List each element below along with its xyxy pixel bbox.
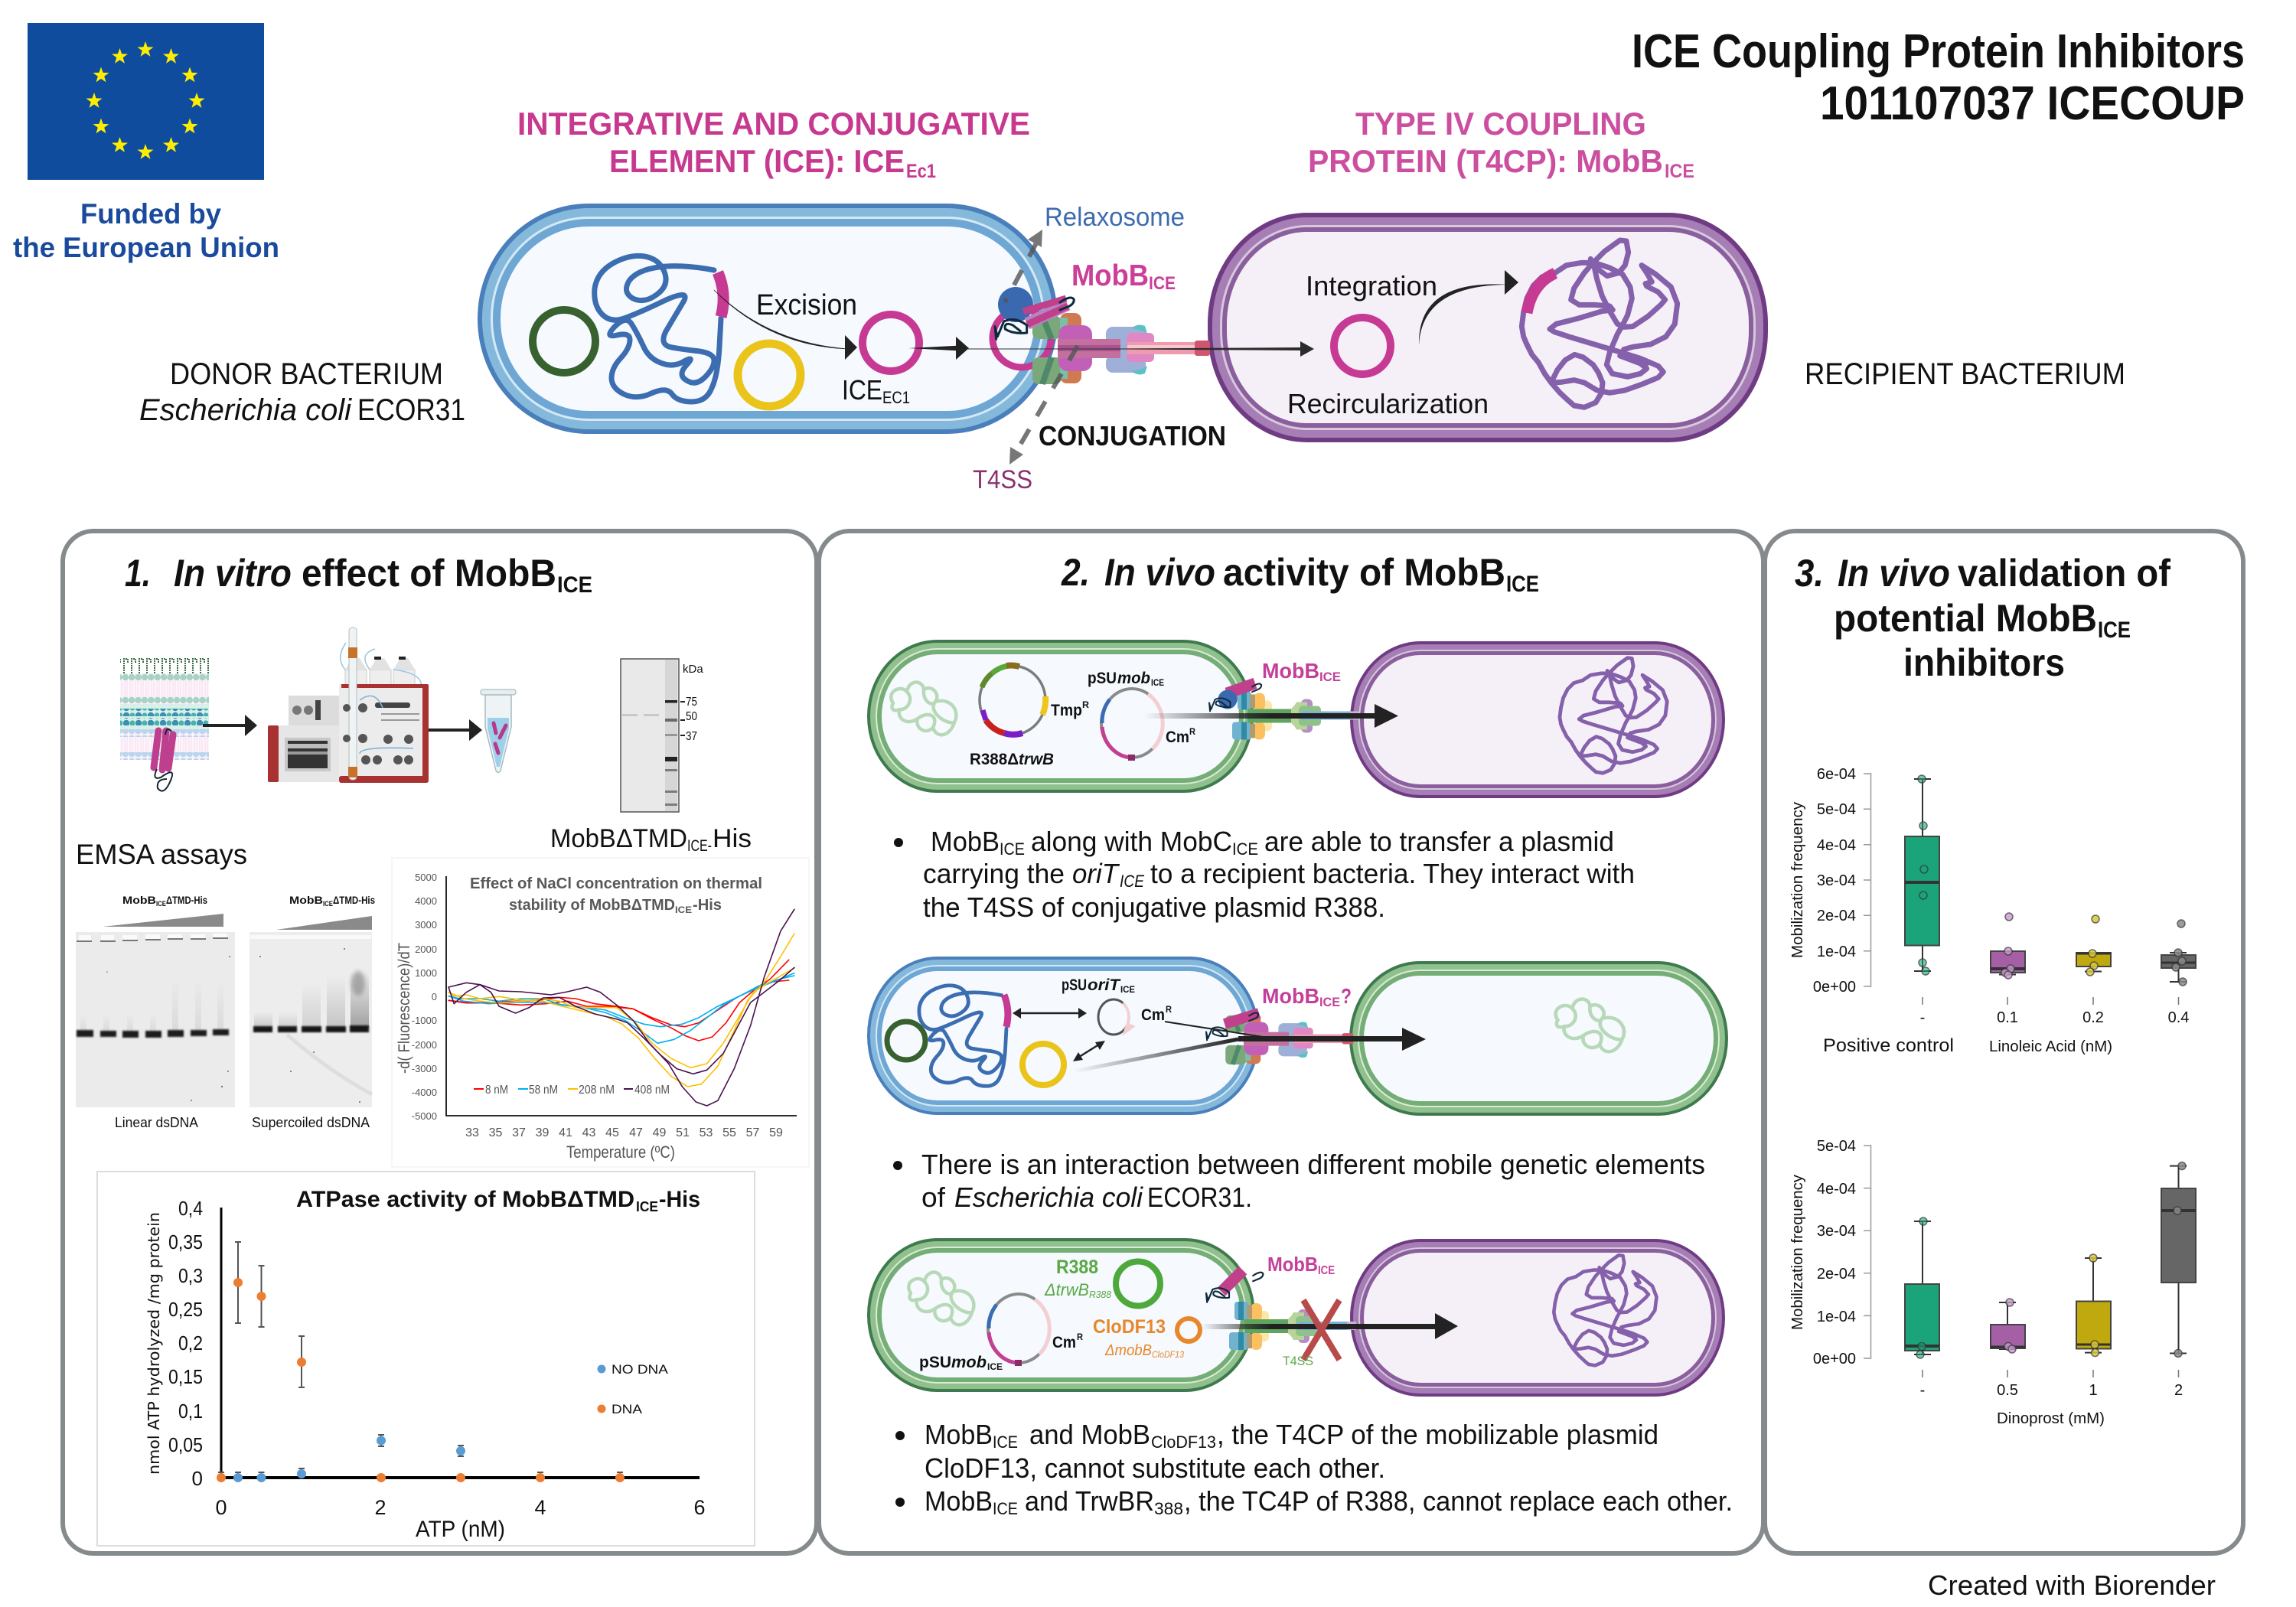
MobB coupling protein: [1023, 298, 1068, 324]
title: 101107037 ICECOUP: [1820, 77, 2245, 130]
text block: bullet 1: carrying the: [923, 858, 1065, 889]
x axis labels: 1: [2089, 1382, 2098, 1399]
EMSA gel: supercoiled dsDNA: MobB: [289, 894, 323, 906]
label: R388 delta trwB: trwB: [1019, 751, 1054, 768]
label: MobB ICE: ICE: [1149, 273, 1176, 294]
recipient cell: [1208, 213, 1768, 442]
plasmid: R388 ring: [1116, 1261, 1160, 1305]
chart legend: 408 nM: [634, 1084, 670, 1097]
label: delta mobB CloDF13: CloDF13: [1152, 1349, 1184, 1360]
x axis labels: 45: [605, 1126, 619, 1139]
box: 0.5 mM: [1991, 1299, 2025, 1353]
y axis: 0e+00: [1813, 1351, 1856, 1367]
y axis labels: 0: [432, 991, 437, 1002]
recipient cell: [1350, 1239, 1725, 1397]
heading: panel 3: 3.: [1795, 552, 1824, 595]
recipient chromosome: [1521, 240, 1678, 407]
x axis labels: 0.5: [1997, 1382, 2018, 1399]
box: 0.4 nM: [2161, 920, 2196, 986]
y axis labels: 1000: [415, 967, 437, 979]
x axis labels: 55: [722, 1126, 736, 1139]
arrow: conjugative transfer: [968, 341, 1314, 357]
heading: integrative and conjugative element: INTEGRATIVE AND CONJUGATIVE: [517, 106, 1030, 142]
text block: bullet 1: are able to transfer a plasmid: [1264, 826, 1614, 857]
x axis title: Temperature (ºC): [566, 1143, 675, 1162]
icon: T4SS with MobB: [1209, 683, 1359, 739]
y axis: 1e-04: [1817, 944, 1856, 960]
label: donor bacterium: ECOR31: [357, 393, 465, 427]
heading: panel 2: [1061, 551, 1539, 597]
gel marker labels: 37: [686, 730, 697, 743]
label: TmpR: Tmp: [1051, 702, 1082, 719]
arrow: chromosome to plasmid interaction: [1013, 1008, 1087, 1019]
chart legend: 58 nM: [529, 1084, 558, 1097]
arrow: integration: [1419, 270, 1518, 345]
label: CmR: Cm: [1141, 1006, 1165, 1024]
label: TmpR: R: [1082, 699, 1089, 710]
text block: bullet 1: ICE: [1000, 839, 1025, 859]
chart legend: 208 nM: [579, 1084, 615, 1097]
label: delta mobB CloDF13: ΔmobB: [1104, 1342, 1152, 1359]
label: MobB ICE: MobB: [1262, 659, 1319, 683]
x axis labels: 33: [465, 1126, 479, 1139]
text block: bullet 3: ICE: [993, 1433, 1018, 1452]
excised ICE circle: [863, 315, 919, 371]
text block: bullet 1: to a recipient bacteria. They interact with: [1150, 858, 1635, 889]
text block: bullet 1: oriT: [1072, 858, 1120, 889]
label: pSUmob: mob: [951, 1354, 987, 1371]
text block: bullet 1: [894, 826, 1635, 923]
text block: bullet 1: along with MobC: [1031, 826, 1232, 857]
chart legend: ATPase: DNA: [612, 1402, 643, 1416]
text block: bullet 4: [895, 1485, 1733, 1518]
y axis: 4e-04: [1817, 1181, 1856, 1198]
gel marker labels: 75: [686, 696, 697, 709]
text block: bullet 4: MobB: [925, 1485, 993, 1517]
text block: bullet 1: MobB: [931, 826, 1000, 857]
donor cell: [867, 1238, 1255, 1392]
icon: EU flag: [28, 23, 264, 180]
label: recipient bacterium: RECIPIENT BACTERIUM: [1805, 357, 2125, 391]
y axis: 3e-04: [1817, 872, 1856, 889]
EMSA gel: supercoiled dsDNA: [249, 894, 375, 1107]
label: purified protein: ICE-: [687, 837, 712, 855]
x axis title: ATP (nM): [416, 1517, 505, 1542]
chart title: ATPase activity: ATPase activity of MobBΔTMD: [296, 1187, 634, 1212]
x axis labels: 47: [629, 1126, 643, 1139]
gel marker labels: 50: [686, 710, 697, 723]
y axis tick labels: 0,05: [168, 1433, 203, 1456]
box: 0.1 nM: [1991, 913, 2025, 979]
label: CONJUGATION: CONJUGATION: [1039, 420, 1226, 451]
chart title: NaCl thermal stability: stability of MobBΔTMD: [509, 897, 675, 914]
label: CmR: Cm: [1052, 1334, 1076, 1351]
x axis tick labels: [215, 1496, 706, 1519]
icon: conjugation machinery T4SS: [993, 287, 1210, 384]
heading: panel 1: In vitro: [174, 552, 292, 595]
text block: bullet 2: ECOR31.: [1147, 1182, 1252, 1213]
y axis: 5e-04: [1817, 801, 1856, 818]
donor cell: [867, 640, 1254, 793]
recipient cell: [1350, 641, 1725, 798]
arrow: excision: [714, 290, 857, 360]
text block: bullet 4: ICE: [993, 1499, 1018, 1518]
label: positive control: Positive control: [1823, 1035, 1954, 1056]
box: control: [1905, 1217, 1939, 1358]
heading: panel 3: [1795, 552, 2170, 684]
heading: panel 3: ICE: [2098, 618, 2131, 643]
arrow: transfer to recipient: [1202, 1313, 1458, 1339]
y axis tick labels: 0,3: [178, 1264, 203, 1287]
heading: panel 3: potential MobB: [1834, 597, 2097, 640]
x axis labels: 59: [769, 1126, 783, 1139]
EMSA gel: supercoiled dsDNA: ΔTMD-His: [333, 894, 375, 906]
label: T4SS: T4SS: [1283, 1354, 1313, 1368]
text block: bullet 1: ICE: [1232, 839, 1258, 859]
heading: panel 2: ICE: [1506, 572, 1539, 597]
diagram: R388 donor mobilizes pSUmob: [867, 640, 1725, 798]
icon: purified protein tube: [481, 689, 516, 773]
arrow: purification to tube: [429, 719, 482, 741]
chart title: NaCl thermal stability: Effect of NaCl concentration on thermal: [470, 875, 762, 892]
chart: ATPase activity scatter: [97, 1172, 755, 1546]
y axis: [1813, 766, 1870, 996]
label: CmR: R: [1166, 1004, 1172, 1015]
panel: 2 in vivo activity: [819, 531, 1763, 1553]
label: pSUmob: pSU: [919, 1354, 951, 1371]
text block: bullet 3: , the T4CP of the mobilizable plasmid: [1217, 1419, 1658, 1450]
label: MobB ICE: ICE: [1318, 1264, 1335, 1277]
box: control: [1905, 775, 1939, 975]
arrow: cm thin pointer: [1165, 1022, 1278, 1039]
x axis labels: [465, 1126, 783, 1139]
heading: panel 3: validation of: [1958, 552, 2170, 595]
y axis tick labels: 0,25: [168, 1298, 203, 1321]
x axis tick labels: 2: [374, 1496, 386, 1519]
y axis: 6e-04: [1817, 766, 1856, 783]
yellow plasmid: [738, 344, 801, 406]
arrow: relaxosome pointer: [1005, 230, 1042, 302]
text block: bullet 4: and TrwBR: [1025, 1485, 1154, 1517]
text block: bullet 3: and MobB: [1029, 1419, 1150, 1450]
label: R388: R388: [1056, 1257, 1098, 1278]
x axis labels: 37: [512, 1126, 526, 1139]
caption: supercoiled dsDNA: Supercoiled dsDNA: [252, 1115, 370, 1130]
label: R388 delta trwB: R388Δ: [970, 751, 1019, 768]
box: 2 mM: [2161, 1162, 2196, 1358]
x axis labels: [1920, 997, 2189, 1026]
icon: chromatography system: [268, 627, 429, 783]
label: donor bacterium: [139, 357, 465, 427]
label: Excision: Excision: [756, 289, 857, 321]
label: CmR: R: [1077, 1332, 1083, 1342]
chart: linoleic acid box plot: [1789, 766, 2196, 1056]
label: Dinoprost: Dinoprost (mM): [1997, 1410, 2105, 1427]
EMSA gel: linear dsDNA: MobB: [122, 894, 156, 906]
y axis tick labels: 0,2: [178, 1332, 203, 1354]
diagram: donor with oriT plasmid: [867, 957, 1728, 1116]
y axis labels: -4000: [412, 1087, 437, 1098]
label: donor bacterium: DONOR BACTERIUM: [170, 357, 443, 391]
y axis: 5e-04: [1817, 1138, 1856, 1155]
title: [1632, 25, 2245, 130]
EMSA gel: linear dsDNA: ICE: [156, 900, 166, 908]
donor chromosome: [595, 256, 721, 402]
gel marker labels: kDa: [683, 663, 703, 676]
x axis labels: 0.2: [2082, 1009, 2104, 1026]
heading: type IV coupling protein: PROTEIN (T4CP): MobB: [1308, 143, 1663, 179]
y axis: 2e-04: [1817, 908, 1856, 924]
y axis tick labels: 0,4: [178, 1197, 203, 1220]
label: Recircularization: Recircularization: [1287, 388, 1489, 419]
heading: panel 1: [125, 552, 592, 598]
heading: type IV coupling protein: ICE: [1665, 161, 1694, 182]
chart: dinoprost box plot: [1789, 1138, 2196, 1427]
label: Relaxosome: Relaxosome: [1045, 203, 1185, 232]
y axis: 3e-04: [1817, 1223, 1856, 1240]
funding statement: [13, 198, 279, 263]
label: MobB ICE question: [1262, 984, 1352, 1009]
x axis labels: 39: [536, 1126, 550, 1139]
y axis tick labels: [168, 1197, 203, 1490]
recirculated ICE circle: [1334, 318, 1391, 374]
text block: bullet 4: , the TC4P of R388, cannot replace each other.: [1184, 1485, 1733, 1517]
heading: panel 3: inhibitors: [1903, 641, 2065, 684]
heading: panel 2: 2.: [1061, 551, 1090, 594]
chart title: ATPase activity: ICE: [636, 1199, 658, 1214]
y axis labels: -1000: [412, 1015, 437, 1026]
icon: T4SS: [1229, 1302, 1356, 1350]
x axis labels: 43: [582, 1126, 595, 1139]
text block: bullet 1: the T4SS of conjugative plasmid R388.: [923, 892, 1385, 923]
funding statement: Funded by: [80, 198, 221, 230]
chart legend: ATPase: [597, 1362, 669, 1416]
y axis labels: -5000: [412, 1110, 437, 1122]
label: CmR: R: [1189, 726, 1195, 737]
heading: panel 2: In vivo: [1104, 551, 1215, 594]
chart: thermal stability line chart: [392, 858, 809, 1167]
label: donor bacterium: Escherichia coli: [139, 393, 352, 427]
label: pSUoriT: pSU: [1062, 976, 1087, 994]
label: pSUmob: [919, 1354, 1003, 1372]
x axis labels: 49: [653, 1126, 666, 1139]
label: MobB ICE question: ICE: [1319, 995, 1340, 1009]
x axis tick labels: 0: [215, 1496, 227, 1519]
y axis labels: [412, 872, 437, 1122]
funding statement: the European Union: [13, 232, 279, 263]
SDS-PAGE gel: [621, 659, 703, 812]
chart legend: [474, 1084, 670, 1097]
x axis labels: 51: [676, 1126, 690, 1139]
y axis: 1e-04: [1817, 1309, 1856, 1325]
donor cell: [867, 957, 1260, 1115]
y axis title: Mobilization frequency: [1789, 1175, 1806, 1330]
chart title: NaCl thermal stability: [470, 875, 762, 915]
label: MobB ICE: ICE: [1319, 670, 1341, 684]
text block: bullet 2: There is an interaction between different mobile genetic elements: [921, 1149, 1705, 1180]
plasmid: pSUmob: [988, 1294, 1049, 1366]
label: Integration: Integration: [1306, 270, 1437, 302]
EMSA gel: linear dsDNA: ΔTMD-His: [166, 894, 207, 906]
heading: panel 1: 1.: [125, 552, 151, 595]
diagram: failed substitution with red cross: [867, 1238, 1725, 1397]
arrow: ICE to conjugation: [908, 337, 969, 360]
text block: bullet 3: CloDF13, cannot substitute each other.: [925, 1452, 1385, 1484]
text block: bullet 2: of: [921, 1182, 946, 1213]
x axis tick labels: 4: [534, 1496, 546, 1519]
x axis labels: 57: [746, 1126, 759, 1139]
text block: bullet 3: [895, 1419, 1658, 1484]
y axis labels: 2000: [415, 944, 437, 955]
caption: linear dsDNA: Linear dsDNA: [115, 1115, 198, 1130]
heading: integrative and conjugative element: Ec1: [906, 161, 936, 182]
heading: panel 1: ICE: [557, 572, 592, 598]
EMSA gel: supercoiled dsDNA: ICE: [323, 900, 333, 908]
label: purified protein: MobBΔTMD: [550, 824, 687, 853]
plasmid: pSUoriT: [1098, 999, 1136, 1036]
icon: red cross: [1303, 1300, 1339, 1360]
y axis title: Mobilization frequency: [1789, 802, 1806, 958]
label: pSUoriT: [1062, 976, 1135, 995]
donor cell: [478, 204, 1058, 434]
y axis title: nmol ATP hydrolyzed /mg protein: [145, 1212, 163, 1475]
heading: panel 1: effect of MobB: [302, 552, 556, 595]
plasmid: pSUmob: [1101, 689, 1163, 761]
chart title: NaCl thermal stability: -His: [693, 897, 722, 914]
x axis labels: 41: [559, 1126, 572, 1139]
x axis labels: 35: [489, 1126, 502, 1139]
label: delta trwB R388: R388: [1089, 1289, 1112, 1300]
label: MobB ICE question: MobB: [1262, 984, 1319, 1008]
label: pSUoriT: ICE: [1120, 984, 1135, 995]
heading: integrative and conjugative element: ELEMENT (ICE): ICE: [609, 143, 905, 179]
credit: Created with Biorender: Created with Biorender: [1928, 1570, 2216, 1601]
y axis tick labels: 0,1: [178, 1400, 203, 1423]
text block: bullet 4: 388: [1154, 1499, 1183, 1518]
label: ICE Ec1: EC1: [882, 388, 910, 407]
arrow: transfer to recipient: [1144, 704, 1398, 728]
chart legend: 8 nM: [485, 1084, 508, 1097]
heading: type IV coupling protein: [1308, 106, 1694, 182]
data points: DNA: [217, 1278, 625, 1482]
label: pSUmob: pSU: [1088, 670, 1117, 687]
label: CmR: Cm: [1166, 729, 1189, 746]
y axis title: -d( Fluorescence)/dT: [396, 943, 413, 1074]
label: ICE Ec1: ICE: [842, 374, 882, 406]
label: delta trwB R388: [1044, 1280, 1112, 1300]
y axis labels: 3000: [415, 919, 437, 931]
label: Linoleic Acid: Linoleic Acid (nM): [1989, 1038, 2112, 1055]
y axis tick labels: 0,35: [168, 1231, 203, 1253]
arrow: yellow plasmid interaction: [1073, 1041, 1105, 1061]
y axis tick labels: 0,15: [168, 1365, 203, 1388]
x axis tick labels: 6: [693, 1496, 706, 1519]
text block: bullet 3: MobB: [925, 1419, 993, 1450]
text block: bullet 2: Escherichia coli: [954, 1182, 1143, 1213]
label: MobB ICE: MobB: [1071, 259, 1149, 292]
heading: type IV coupling protein: TYPE IV COUPLING: [1355, 106, 1646, 142]
integrated ICE segment: [718, 272, 723, 317]
label: MobB ICE question: ?: [1341, 984, 1352, 1008]
y axis tick labels: 0: [192, 1467, 203, 1490]
plasmid: R388: [980, 666, 1045, 735]
label: delta trwB R388: ΔtrwB: [1044, 1280, 1089, 1299]
label: delta mobB CloDF13: [1104, 1342, 1184, 1360]
relaxosome sphere: [998, 287, 1033, 322]
heading: integrative and conjugative element: [517, 106, 1030, 182]
x axis labels: -: [1920, 1382, 1925, 1399]
green plasmid: [533, 310, 595, 373]
y axis: 2e-04: [1817, 1266, 1856, 1283]
box: 1 mM: [2076, 1254, 2111, 1357]
label: T4SS: T4SS: [973, 465, 1032, 494]
y axis labels: 4000: [415, 895, 437, 907]
text block: bullet 1: ICE: [1120, 872, 1144, 891]
label: MobB ICE: MobB: [1267, 1253, 1318, 1276]
y axis: 0e+00: [1813, 979, 1856, 996]
label: purified protein: [550, 824, 752, 855]
chart legend: ATPase: NO DNA: [612, 1362, 669, 1377]
recipient cell: [1349, 961, 1728, 1116]
heading: panel 3: In vivo: [1838, 552, 1950, 595]
label: CloDF13: CloDF13: [1093, 1316, 1166, 1338]
y axis: 4e-04: [1817, 837, 1856, 854]
x axis labels: -: [1920, 1009, 1925, 1026]
label: pSUmob: ICE: [987, 1361, 1003, 1372]
chart title: ATPase activity: -His: [659, 1187, 700, 1212]
label: pSUmob: [1088, 670, 1164, 688]
x axis labels: 0.1: [1997, 1009, 2018, 1026]
x axis labels: 53: [700, 1126, 713, 1139]
chart title: NaCl thermal stability: ICE: [675, 905, 692, 915]
EMSA gel: linear dsDNA: [76, 894, 235, 1107]
label: pSUmob: ICE: [1151, 677, 1164, 688]
label: purified protein: His: [713, 824, 752, 853]
arrow: T4SS pointer: [1009, 346, 1078, 464]
y axis labels: -2000: [412, 1039, 437, 1051]
data points: no DNA: [233, 1436, 465, 1482]
label: R388 delta trwB: [970, 751, 1054, 768]
text block: bullet 3: CloDF13: [1151, 1433, 1216, 1452]
arrow: membrane to purification: [203, 715, 257, 736]
box: 0.2 nM: [2076, 915, 2111, 976]
plasmid: CloDF13 ring: [1177, 1319, 1200, 1341]
label: EMSA assays: EMSA assays: [76, 839, 247, 870]
icon: T4SS with MobB: [1206, 1013, 1353, 1064]
panel: 1 in vitro effect: [63, 531, 817, 1553]
x axis labels: [1920, 1370, 2183, 1399]
panel: 3 in vivo validation: [1765, 531, 2243, 1553]
icon: membrane with MobB protein: [120, 658, 209, 791]
text block: bullet 2: [893, 1149, 1705, 1213]
icon: MobB rod: [1206, 1270, 1263, 1302]
data lines: [448, 909, 794, 1106]
arrow: transfer to recipient: [1074, 1028, 1426, 1071]
label: pSUoriT: oriT: [1088, 976, 1121, 994]
error bars: [218, 1242, 623, 1478]
label: pSUmob: mob: [1117, 670, 1150, 687]
y axis labels: 5000: [415, 872, 437, 883]
x axis labels: 2: [2174, 1382, 2183, 1399]
y axis: [1813, 1138, 1870, 1367]
gel marker labels: [683, 663, 703, 743]
integrated ICE segment in recipient: [1527, 273, 1555, 313]
heading: panel 2: activity of MobB: [1223, 551, 1505, 594]
x axis labels: 0.4: [2168, 1009, 2189, 1026]
y axis labels: -3000: [412, 1063, 437, 1074]
label: ICE Ec1: [842, 374, 910, 407]
